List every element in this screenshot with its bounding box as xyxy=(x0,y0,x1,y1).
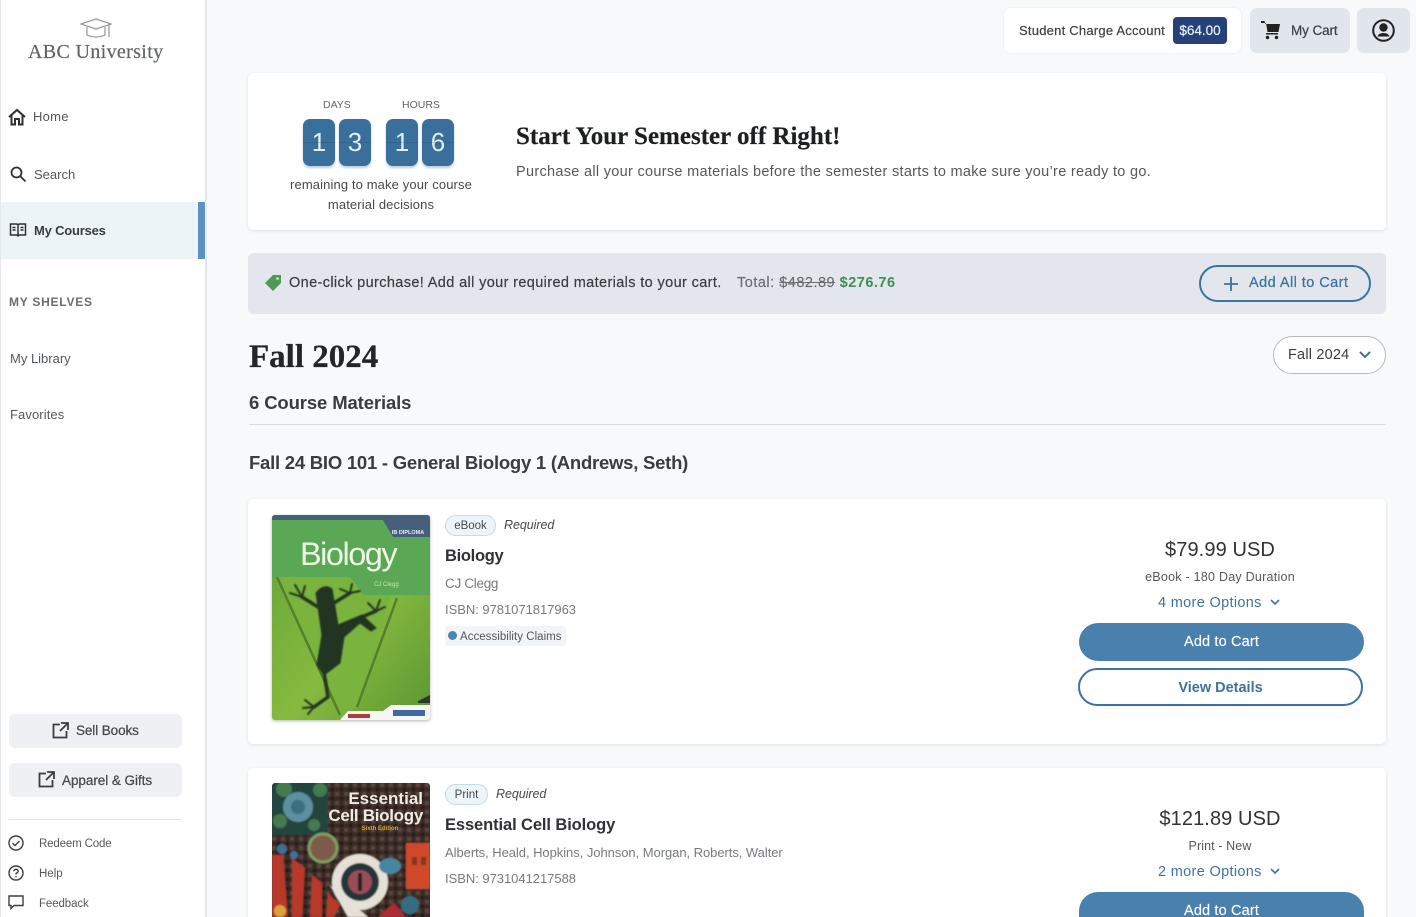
accessibility claims: Accessibility Claims xyxy=(460,631,562,643)
nav: My Courses active xyxy=(1,202,206,259)
dropdown: term: Fall 2024 xyxy=(1288,347,1349,363)
countdown caption: remaining to make your course xyxy=(290,177,472,192)
icon: info xyxy=(448,631,457,640)
book cover: Essential Cell Biology: Cell Biology xyxy=(328,806,424,825)
balance badge xyxy=(1173,17,1227,44)
icon: cart xyxy=(1261,21,1280,40)
icon: plus xyxy=(1224,277,1238,291)
nav: My Courses active: My Courses xyxy=(34,223,106,238)
nav: Search: Search xyxy=(34,167,75,182)
panel: semester countdown xyxy=(248,73,1386,230)
icon: chevron xyxy=(1270,599,1280,605)
digit 6 xyxy=(422,119,454,166)
book title: Biology xyxy=(445,547,503,565)
nav: My Library: My Library xyxy=(10,351,71,366)
active marker xyxy=(198,202,205,259)
icon: price tag xyxy=(265,275,281,291)
icon: chevron xyxy=(1359,351,1371,358)
button: add all to cart: Add All to Cart xyxy=(1249,275,1348,291)
button: Sell Books xyxy=(9,714,182,748)
icon: graduation cap xyxy=(80,18,112,38)
book isbn: ISBN: 9781071817963 xyxy=(445,602,576,617)
book cover: Biology xyxy=(272,515,430,720)
button: add to cart xyxy=(1079,623,1364,661)
link: Help xyxy=(8,865,63,881)
course heading: Fall 24 BIO 101 - General Biology 1 (Andrews, Seth) xyxy=(249,452,688,473)
required label: Required xyxy=(504,518,554,532)
accessibility claims xyxy=(445,626,566,646)
format badge: eBook xyxy=(445,515,496,536)
more options: 4 more Options xyxy=(1158,595,1262,611)
icon: speech bubble xyxy=(8,895,24,910)
semester message: Purchase all your course materials before the semester starts to make sure you’re ready to go. xyxy=(516,164,1151,180)
button: Sell Books: Sell Books xyxy=(76,723,139,738)
icon: external link xyxy=(52,722,69,738)
days label: DAYS xyxy=(323,99,351,111)
link: Redeem Code: Redeem Code xyxy=(39,838,112,850)
digit 1: 1 xyxy=(395,127,409,157)
button: My Cart xyxy=(1250,8,1350,53)
nav: Favorites: Favorites xyxy=(10,407,64,422)
icon: help circle xyxy=(8,865,24,881)
countdown caption: material decisions xyxy=(328,197,434,212)
hours label: HOURS xyxy=(402,99,440,111)
button: add to cart: Add to Cart xyxy=(1184,634,1259,650)
subheading: course materials count: 6 Course Materials xyxy=(249,392,411,413)
button: My Cart: My Cart xyxy=(1291,23,1338,38)
link: Redeem Code xyxy=(8,835,112,851)
student charge account: Student Charge Account xyxy=(1019,23,1165,38)
book cover: Essential Cell Biology: Sixth Edition xyxy=(362,826,399,832)
digit 1: 1 xyxy=(312,127,326,157)
icon: external link xyxy=(38,771,55,788)
logo: ABC University xyxy=(28,18,164,63)
digit 3 xyxy=(339,119,371,166)
price: biology: $79.99 USD xyxy=(1165,539,1275,561)
link: Feedback xyxy=(8,895,89,910)
link: Feedback: Feedback xyxy=(39,898,89,910)
button: Apparel and Gifts xyxy=(9,763,182,797)
button: add all to cart xyxy=(1199,265,1371,302)
heading: start your semester: Start Your Semester off Right! xyxy=(516,123,840,150)
button: view details: View Details xyxy=(1178,680,1263,696)
digit 1 xyxy=(386,119,418,166)
dropdown: term xyxy=(1273,336,1386,374)
icon: home xyxy=(8,108,26,126)
total label and prices: Total: $482.89 $276.76 xyxy=(737,275,896,291)
panel: essential cell biology book xyxy=(248,768,1386,917)
digit 6: 6 xyxy=(431,127,445,157)
nav: Search xyxy=(10,166,75,182)
icon: chevron xyxy=(1270,868,1280,874)
book cover: Biology: CJ Clegg xyxy=(374,582,399,588)
panel: biology book xyxy=(248,499,1386,744)
nav: Home: Home xyxy=(33,109,69,124)
book cover: Biology: Biology xyxy=(300,536,398,572)
university name: ABC University xyxy=(28,41,163,63)
price: essential cell biology: $121.89 USD xyxy=(1159,808,1281,830)
book cover: Biology: IB DIPLOMA xyxy=(392,530,424,536)
nav: Home xyxy=(8,108,69,126)
book cover: Essential Cell Biology xyxy=(272,783,430,917)
digit 1 xyxy=(303,119,335,166)
book author: CJ Clegg xyxy=(445,576,498,591)
book isbn: ISBN: 9731041217588 xyxy=(445,871,576,886)
book title: Essential Cell Biology xyxy=(445,816,615,834)
format badge: Print xyxy=(445,784,488,805)
sidebar xyxy=(0,0,207,917)
link: Help: Help xyxy=(39,868,63,880)
shelves heading: MY SHELVES xyxy=(9,295,93,309)
icon: user circle xyxy=(1372,19,1395,42)
heading: Fall 2024: Fall 2024 xyxy=(249,339,378,375)
icon: check circle xyxy=(8,835,24,851)
format badge: Print: Print xyxy=(455,789,478,801)
countdown caption xyxy=(290,177,472,212)
countdown xyxy=(323,99,440,111)
button: account xyxy=(1357,8,1410,53)
button: add to cart xyxy=(1079,892,1364,917)
icon: open book xyxy=(10,223,26,237)
panel: one-click purchase xyxy=(248,253,1386,314)
button: view details xyxy=(1078,668,1363,706)
balance badge: $64.00 xyxy=(1179,23,1221,38)
format duration: eBook - 180 Day Duration xyxy=(1145,570,1295,584)
format condition: Print - New xyxy=(1189,839,1251,853)
book authors: Alberts, Heald, Hopkins, Johnson, Morgan, Roberts, Walter xyxy=(445,845,783,860)
format badge: eBook: eBook xyxy=(454,520,487,532)
purchase message: One-click purchase! Add all your required materials to your cart. xyxy=(289,275,722,291)
more options: 2 more Options xyxy=(1158,864,1262,880)
icon: search xyxy=(10,166,26,182)
required label: Required xyxy=(496,787,546,801)
digit 3: 3 xyxy=(348,127,362,157)
button: Apparel and Gifts: Apparel & Gifts xyxy=(62,773,152,788)
student charge account xyxy=(1004,8,1241,53)
book cover: Essential Cell Biology: Essential xyxy=(348,789,423,808)
